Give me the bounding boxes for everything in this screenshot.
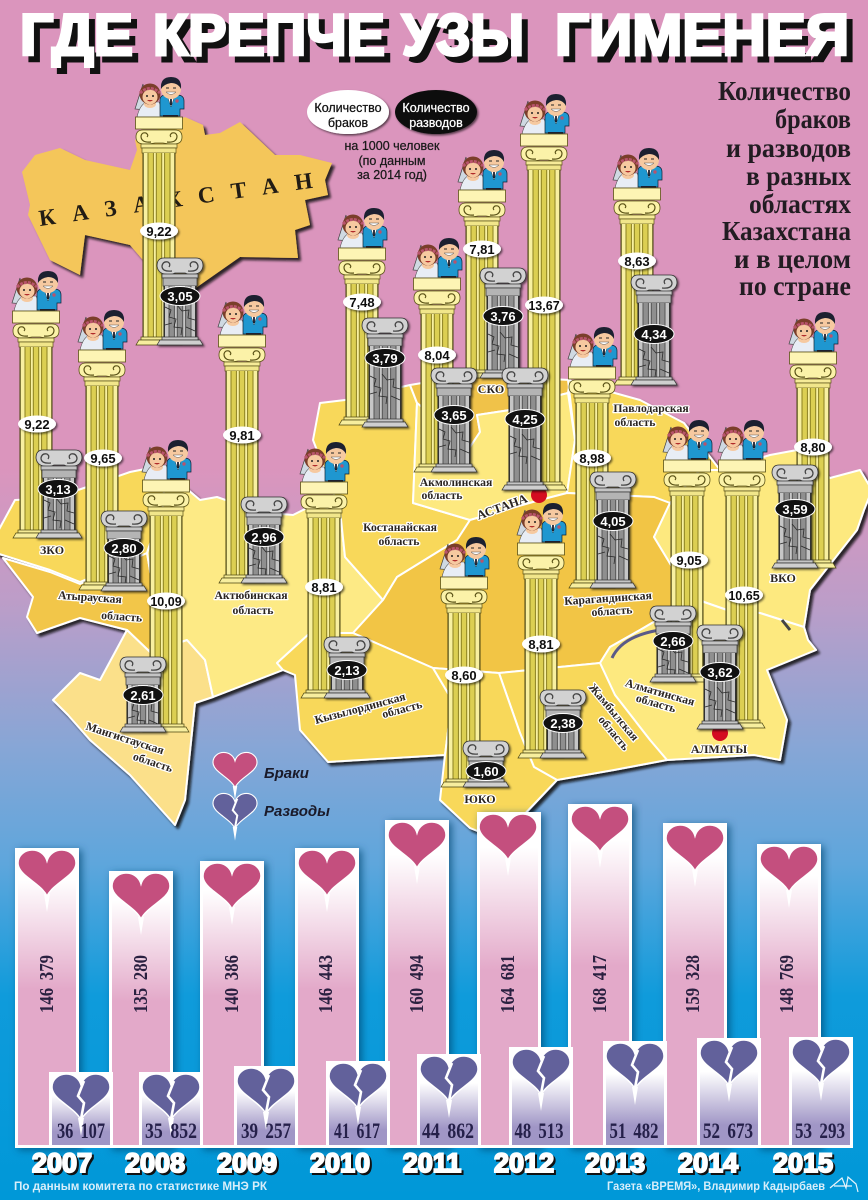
legend note: за 2014 год) (357, 168, 427, 182)
marriage value: 9,81 (229, 428, 255, 443)
pair: Pavlodar (613, 148, 677, 385)
icon: couple (142, 440, 191, 480)
divorce value (104, 538, 144, 558)
region: East Kazakhstan (654, 450, 868, 627)
bar 2008 marriages: 135 280 (130, 955, 152, 1013)
bar 2011 marriages (386, 822, 448, 1146)
marriage value: 8,98 (579, 451, 605, 466)
credit note: Газета «ВРЕМЯ», Владимир Кадырбаев (607, 1181, 825, 1193)
divorce value (327, 660, 367, 680)
marriage column (12, 311, 60, 538)
marriages oval (307, 90, 389, 134)
subtitle: right text block: Казахстана (722, 216, 851, 246)
label: divorces: Разводы (264, 803, 330, 820)
marriage value (305, 578, 343, 596)
divorce value (634, 324, 674, 344)
label: Astana: АСТАНА (475, 491, 529, 523)
marriage column (136, 117, 182, 345)
bar 2014 divorces (698, 1040, 760, 1146)
region: South Kazakhstan (433, 668, 557, 840)
divorce column (157, 258, 203, 345)
icon: couple (300, 442, 349, 482)
marriage value (670, 552, 708, 568)
marriage value: 8,63 (624, 254, 650, 269)
divorce column (480, 268, 526, 378)
pair: Mangistau (120, 440, 191, 732)
bar 2015 divorces (790, 1038, 852, 1146)
title: ГДЕ (26, 9, 139, 74)
title: УЗЫ (402, 3, 524, 68)
divorce value (244, 528, 284, 546)
title: ГИМЕНЕЯ (555, 3, 849, 68)
bar 2009 divorces (236, 1068, 296, 1146)
region: Karaganda (353, 493, 704, 673)
bar 2014 marriages: 159 328 (682, 955, 704, 1013)
pair: Zhambyl (517, 503, 586, 758)
icon: couple (613, 148, 662, 188)
marriage value (522, 636, 560, 652)
label: VKO: ВКО (770, 571, 796, 585)
marriage column (338, 248, 386, 425)
divorce value: 2,38 (550, 716, 576, 731)
subtitle: right text block: браков (775, 104, 851, 134)
year axis labels: 2010 (312, 1150, 372, 1180)
bar 2013 marriages (570, 806, 630, 1146)
pair: Atyrau (78, 310, 147, 591)
divorce column (650, 606, 696, 682)
label: marriages: Браки (264, 765, 309, 782)
Lake Balkhash (612, 630, 660, 658)
year axis labels: 2012 (496, 1150, 556, 1180)
year axis labels: 2014 (680, 1150, 740, 1180)
marriage value (418, 346, 456, 364)
year axis labels: 2010 (310, 1148, 370, 1178)
label: Zhambyl: Жамбылская (586, 681, 642, 744)
capital marker: Astana (531, 487, 547, 503)
source note: По данным комитета по статистике МНЭ РК (14, 1181, 268, 1193)
bar 2015 divorces: 53 293 (795, 1118, 845, 1143)
icon: broken heart divorces (213, 793, 257, 841)
marriage value: 8,60 (451, 668, 477, 683)
divorce value: 4,05 (600, 514, 626, 529)
mini map: Kazakhstan silhouette with name (22, 117, 332, 300)
icon: couple (338, 208, 387, 248)
bar 2011 marriages: 160 494 (406, 955, 428, 1013)
marriage value (223, 426, 261, 444)
capital marker: Almaty (712, 725, 728, 741)
region: Kyzylorda (277, 633, 452, 762)
bar 2007 marriages: 146 379 (36, 955, 58, 1013)
marriage column (78, 350, 126, 590)
label: Pavlodar (613, 402, 689, 429)
divorce column (631, 275, 677, 385)
label: Pavlodar: область (615, 416, 655, 429)
year axis labels: 2008 (127, 1150, 187, 1180)
divorce value: 2,96 (251, 530, 277, 545)
icon: couple (520, 94, 569, 134)
divorce value: 3,79 (372, 351, 398, 366)
legend note (345, 139, 440, 182)
pair: Aktobe (218, 295, 287, 583)
marriage value (445, 666, 483, 684)
region: Zhambyl (499, 663, 667, 780)
divorce column (324, 637, 370, 698)
mini map: Kazakhstan silhouette with name: КАЗАХСТАН (37, 168, 314, 231)
label: Karaganda (564, 589, 654, 621)
marriage column (414, 278, 460, 472)
divorces oval: Количество (402, 101, 470, 115)
marriage value (618, 252, 656, 270)
region labels (40, 382, 796, 806)
divorce value: 3,62 (707, 665, 733, 680)
marriage value: 9,22 (146, 224, 172, 239)
divorce value (38, 480, 78, 498)
icon: couple (568, 327, 617, 367)
label: ZKO: ЗКО (40, 543, 64, 557)
divorce column (697, 625, 743, 729)
marriage value: 7,81 (469, 242, 495, 257)
pair: South Kazakhstan (440, 537, 509, 787)
icon: heart marriages (213, 752, 257, 800)
marriage value: 8,81 (528, 637, 554, 652)
title: КРЕПЧЕ (159, 9, 391, 74)
divorce value: 3,65 (441, 408, 467, 423)
marriage value: 13,67 (528, 299, 560, 313)
year axis labels: 2009 (219, 1150, 279, 1180)
bar 2010 divorces (328, 1062, 388, 1146)
bar 2012 divorces (510, 1048, 572, 1146)
subtitle: right text block: Количество (718, 76, 851, 106)
pair: Karaganda (568, 327, 636, 588)
label: Kostanay (363, 521, 438, 548)
label: Aktobe (214, 589, 288, 617)
icon: couple (458, 150, 507, 190)
marriage value: 8,04 (424, 348, 450, 363)
divorce column (540, 690, 586, 758)
label: Akmola: Акмолинская (420, 476, 493, 489)
year axis labels: 2015 (775, 1150, 835, 1180)
title (20, 3, 855, 74)
subtitle: right text block: в разных (746, 161, 851, 191)
marriage column (568, 367, 616, 588)
pair: country total (135, 77, 203, 345)
small lake (782, 620, 790, 630)
year axis labels: 2012 (494, 1148, 554, 1178)
pair: Akmola (413, 238, 477, 472)
label: Akmola: область (422, 489, 462, 502)
divorce column (241, 497, 287, 583)
subtitle: right text block (718, 76, 851, 301)
pair: Almaty oblast (650, 420, 712, 682)
icon: signature (830, 1177, 858, 1192)
bar 2012 marriages: 164 681 (497, 955, 519, 1013)
marriage value (725, 586, 763, 604)
divorces oval: разводов (409, 116, 463, 130)
region: Akmola (413, 393, 575, 520)
label: Almaty oblast: область (634, 692, 677, 715)
label: Aktobe: Актюбинская (214, 589, 288, 602)
label: Mangistau (84, 720, 174, 775)
bar 2009 marriages: 140 386 (221, 955, 243, 1013)
year axis labels: 2007 (34, 1150, 94, 1180)
label: Karaganda: Карагандинская (564, 589, 653, 608)
year axis labels (32, 1148, 835, 1180)
icon: couple (12, 271, 61, 311)
icon: couple (718, 420, 767, 460)
icon: couple (413, 238, 462, 278)
title: КРЕПЧЕ (153, 3, 385, 68)
divorce value: 2,13 (334, 663, 360, 678)
divorce column (36, 450, 82, 538)
region: North Kazakhstan (410, 375, 570, 447)
bar chart: divorces per year (50, 1038, 852, 1146)
divorce value: 1,60 (473, 764, 499, 779)
bar 2011 divorces (418, 1056, 480, 1146)
bar 2009 divorces: 39 257 (241, 1118, 291, 1143)
marriage column (718, 460, 766, 728)
label: Atyrau: Атырауская (58, 589, 123, 606)
title: УЗЫ (408, 9, 530, 74)
year axis labels: 2011 (403, 1148, 461, 1178)
divorce value (434, 406, 474, 424)
label: Pavlodar: Павлодарская (613, 402, 689, 415)
bar 2011 divorces: 44 862 (422, 1118, 474, 1143)
label: Kyzylorda: область (381, 698, 424, 721)
pair: East Kazakhstan (772, 312, 838, 568)
divorces oval (395, 90, 477, 134)
marriage column (790, 352, 836, 568)
marriage value (147, 592, 185, 610)
title: ГИМЕНЕЯ (561, 9, 855, 74)
pair: Astana (502, 94, 569, 490)
marriage value (84, 450, 122, 466)
divorce value: 4,25 (512, 412, 538, 427)
bar 2012 divorces: 48 513 (514, 1118, 564, 1143)
marriage value (140, 222, 178, 240)
bar 2013 marriages: 168 417 (589, 955, 611, 1013)
label: Karaganda: область (591, 603, 633, 619)
year axis labels: 2015 (773, 1148, 833, 1178)
marriage value (18, 416, 56, 432)
subtitle: right text block: по стране (739, 271, 851, 301)
marriage value: 9,22 (24, 417, 50, 432)
marriage value: 10,65 (728, 589, 760, 603)
year axis labels: 2014 (678, 1148, 738, 1178)
subtitle: right text block: и в целом (734, 244, 851, 274)
label: Kyzylorda: Кызылординская (313, 690, 408, 727)
main map of Kazakhstan regions (0, 375, 868, 840)
pair: North Kazakhstan (458, 150, 526, 378)
marriage column (142, 480, 190, 732)
divorce value: 3,76 (490, 309, 516, 324)
marriage value (343, 294, 381, 310)
divorce column (362, 318, 408, 427)
divorce value (653, 632, 693, 650)
bar 2010 marriages (296, 850, 358, 1146)
label: Kostanay: область (379, 535, 419, 548)
year axis labels: 2013 (585, 1148, 645, 1178)
year axis labels: 2009 (217, 1148, 277, 1178)
marriage value: 8,80 (800, 440, 826, 455)
label: Akmola (420, 476, 493, 502)
marriage column (458, 190, 506, 378)
divorce column (463, 741, 509, 787)
marriage value: 9,05 (676, 553, 702, 568)
bar 2010 marriages: 146 443 (315, 955, 337, 1013)
marriage value (794, 438, 832, 456)
bar 2008 divorces: 35 852 (145, 1118, 197, 1143)
divorce value: 3,13 (45, 482, 71, 497)
label: Atyrau (56, 589, 144, 625)
bar 2010 divorces: 41 617 (334, 1118, 380, 1143)
bar 2013 divorces: 51 482 (610, 1118, 658, 1143)
marriage value: 9,65 (90, 451, 116, 466)
marriage value (573, 450, 611, 466)
marriage column (520, 134, 568, 490)
divorce value (700, 662, 740, 682)
bar 2015 marriages (758, 846, 820, 1146)
label: Atyrau: область (101, 609, 143, 625)
subtitle: right text block: и разводов (726, 133, 851, 163)
divorce column (772, 465, 818, 568)
legend note: (по данным (358, 154, 426, 168)
region: Pavlodar (567, 380, 720, 503)
legend: column value ovals (307, 90, 477, 182)
bar 2012 marriages (478, 814, 540, 1146)
bar 2015 marriages: 148 769 (776, 955, 798, 1013)
region: Mangistau (53, 630, 213, 825)
divorce value (365, 348, 405, 368)
marriage column (664, 460, 710, 682)
pair: ZKO (12, 271, 82, 538)
region: Atyrau (3, 553, 155, 652)
icon: couple (135, 77, 184, 117)
region: West Kazakhstan (0, 466, 165, 582)
divorce value (543, 714, 583, 732)
icon: couple (440, 537, 489, 577)
legend: hearts (213, 752, 330, 841)
marriage value: 10,09 (150, 595, 182, 609)
icon: couple (789, 312, 838, 352)
marriage value: 8,81 (311, 580, 337, 595)
marriage column (518, 543, 564, 758)
label: Aktobe: область (233, 604, 273, 617)
pair: Kostanay (338, 208, 408, 427)
divorce value: 2,80 (111, 541, 137, 556)
bar chart: marriages per year (16, 806, 820, 1146)
label: Almaty: АЛМАТЫ (691, 742, 747, 756)
divorce column (431, 368, 477, 472)
region: Almaty oblast (600, 602, 816, 760)
divorce value (466, 762, 506, 780)
bar 2013 divorces (604, 1042, 666, 1146)
bar 2014 marriages (664, 824, 726, 1146)
title: ГДЕ (20, 3, 133, 68)
divorce value (483, 306, 523, 326)
divorce value (505, 410, 545, 428)
marriage value (463, 240, 501, 258)
icon: couple (78, 310, 127, 350)
bar 2008 divorces (140, 1074, 202, 1146)
divorce column (120, 657, 166, 732)
divorce column (590, 472, 636, 588)
bar 2009 marriages (202, 862, 262, 1146)
label: Zhambyl: область (595, 713, 632, 753)
region: Kostanay (313, 385, 470, 600)
label: Mangistau: Мангистауская (84, 720, 166, 757)
pair: Kyzylorda (300, 442, 370, 698)
divorce value (123, 686, 163, 704)
subtitle: right text block: областях (749, 189, 851, 219)
year axis labels: 2011 (405, 1150, 463, 1180)
icon: couple (218, 295, 267, 335)
marriage column (300, 482, 348, 698)
label: YuKO: ЮКО (464, 792, 496, 806)
legend note: на 1000 человек (345, 139, 440, 153)
divorce value: 2,61 (130, 688, 156, 703)
label: Almaty oblast: Алматинская (624, 676, 697, 709)
divorce value: 3,05 (167, 289, 193, 304)
marriage column (440, 577, 488, 787)
pair: Almaty city (697, 420, 767, 729)
icon: couple (517, 503, 566, 543)
bar 2014 divorces: 52 673 (703, 1118, 753, 1143)
divorce value (775, 500, 815, 518)
marriage column (218, 335, 266, 583)
bar 2007 marriages (16, 850, 78, 1146)
marriage column (614, 188, 660, 385)
marriage value: 7,48 (349, 295, 375, 310)
bar 2007 divorces (50, 1074, 112, 1146)
marriage value (525, 296, 563, 314)
year axis labels: 2008 (125, 1148, 185, 1178)
region: Aktobe (147, 466, 383, 697)
year axis labels: 2013 (587, 1150, 647, 1180)
year axis labels: 2007 (32, 1148, 92, 1178)
label: Mangistau: область (131, 750, 174, 775)
icon: couple (663, 420, 712, 460)
divorce value: 2,66 (660, 634, 686, 649)
label: Kostanay: Костанайская (363, 521, 438, 534)
divorce value: 4,34 (641, 327, 667, 342)
divorce column (502, 368, 548, 490)
bar 2007 divorces: 36 107 (57, 1118, 105, 1143)
divorce value: 3,59 (782, 502, 808, 517)
marriages oval: Количество (314, 101, 382, 115)
divorce value (593, 512, 633, 530)
bar 2008 marriages (110, 872, 172, 1146)
divorce column (101, 511, 147, 591)
divorce value (160, 286, 200, 306)
marriages oval: браков (328, 116, 368, 130)
label: SKO: СКО (478, 382, 504, 396)
